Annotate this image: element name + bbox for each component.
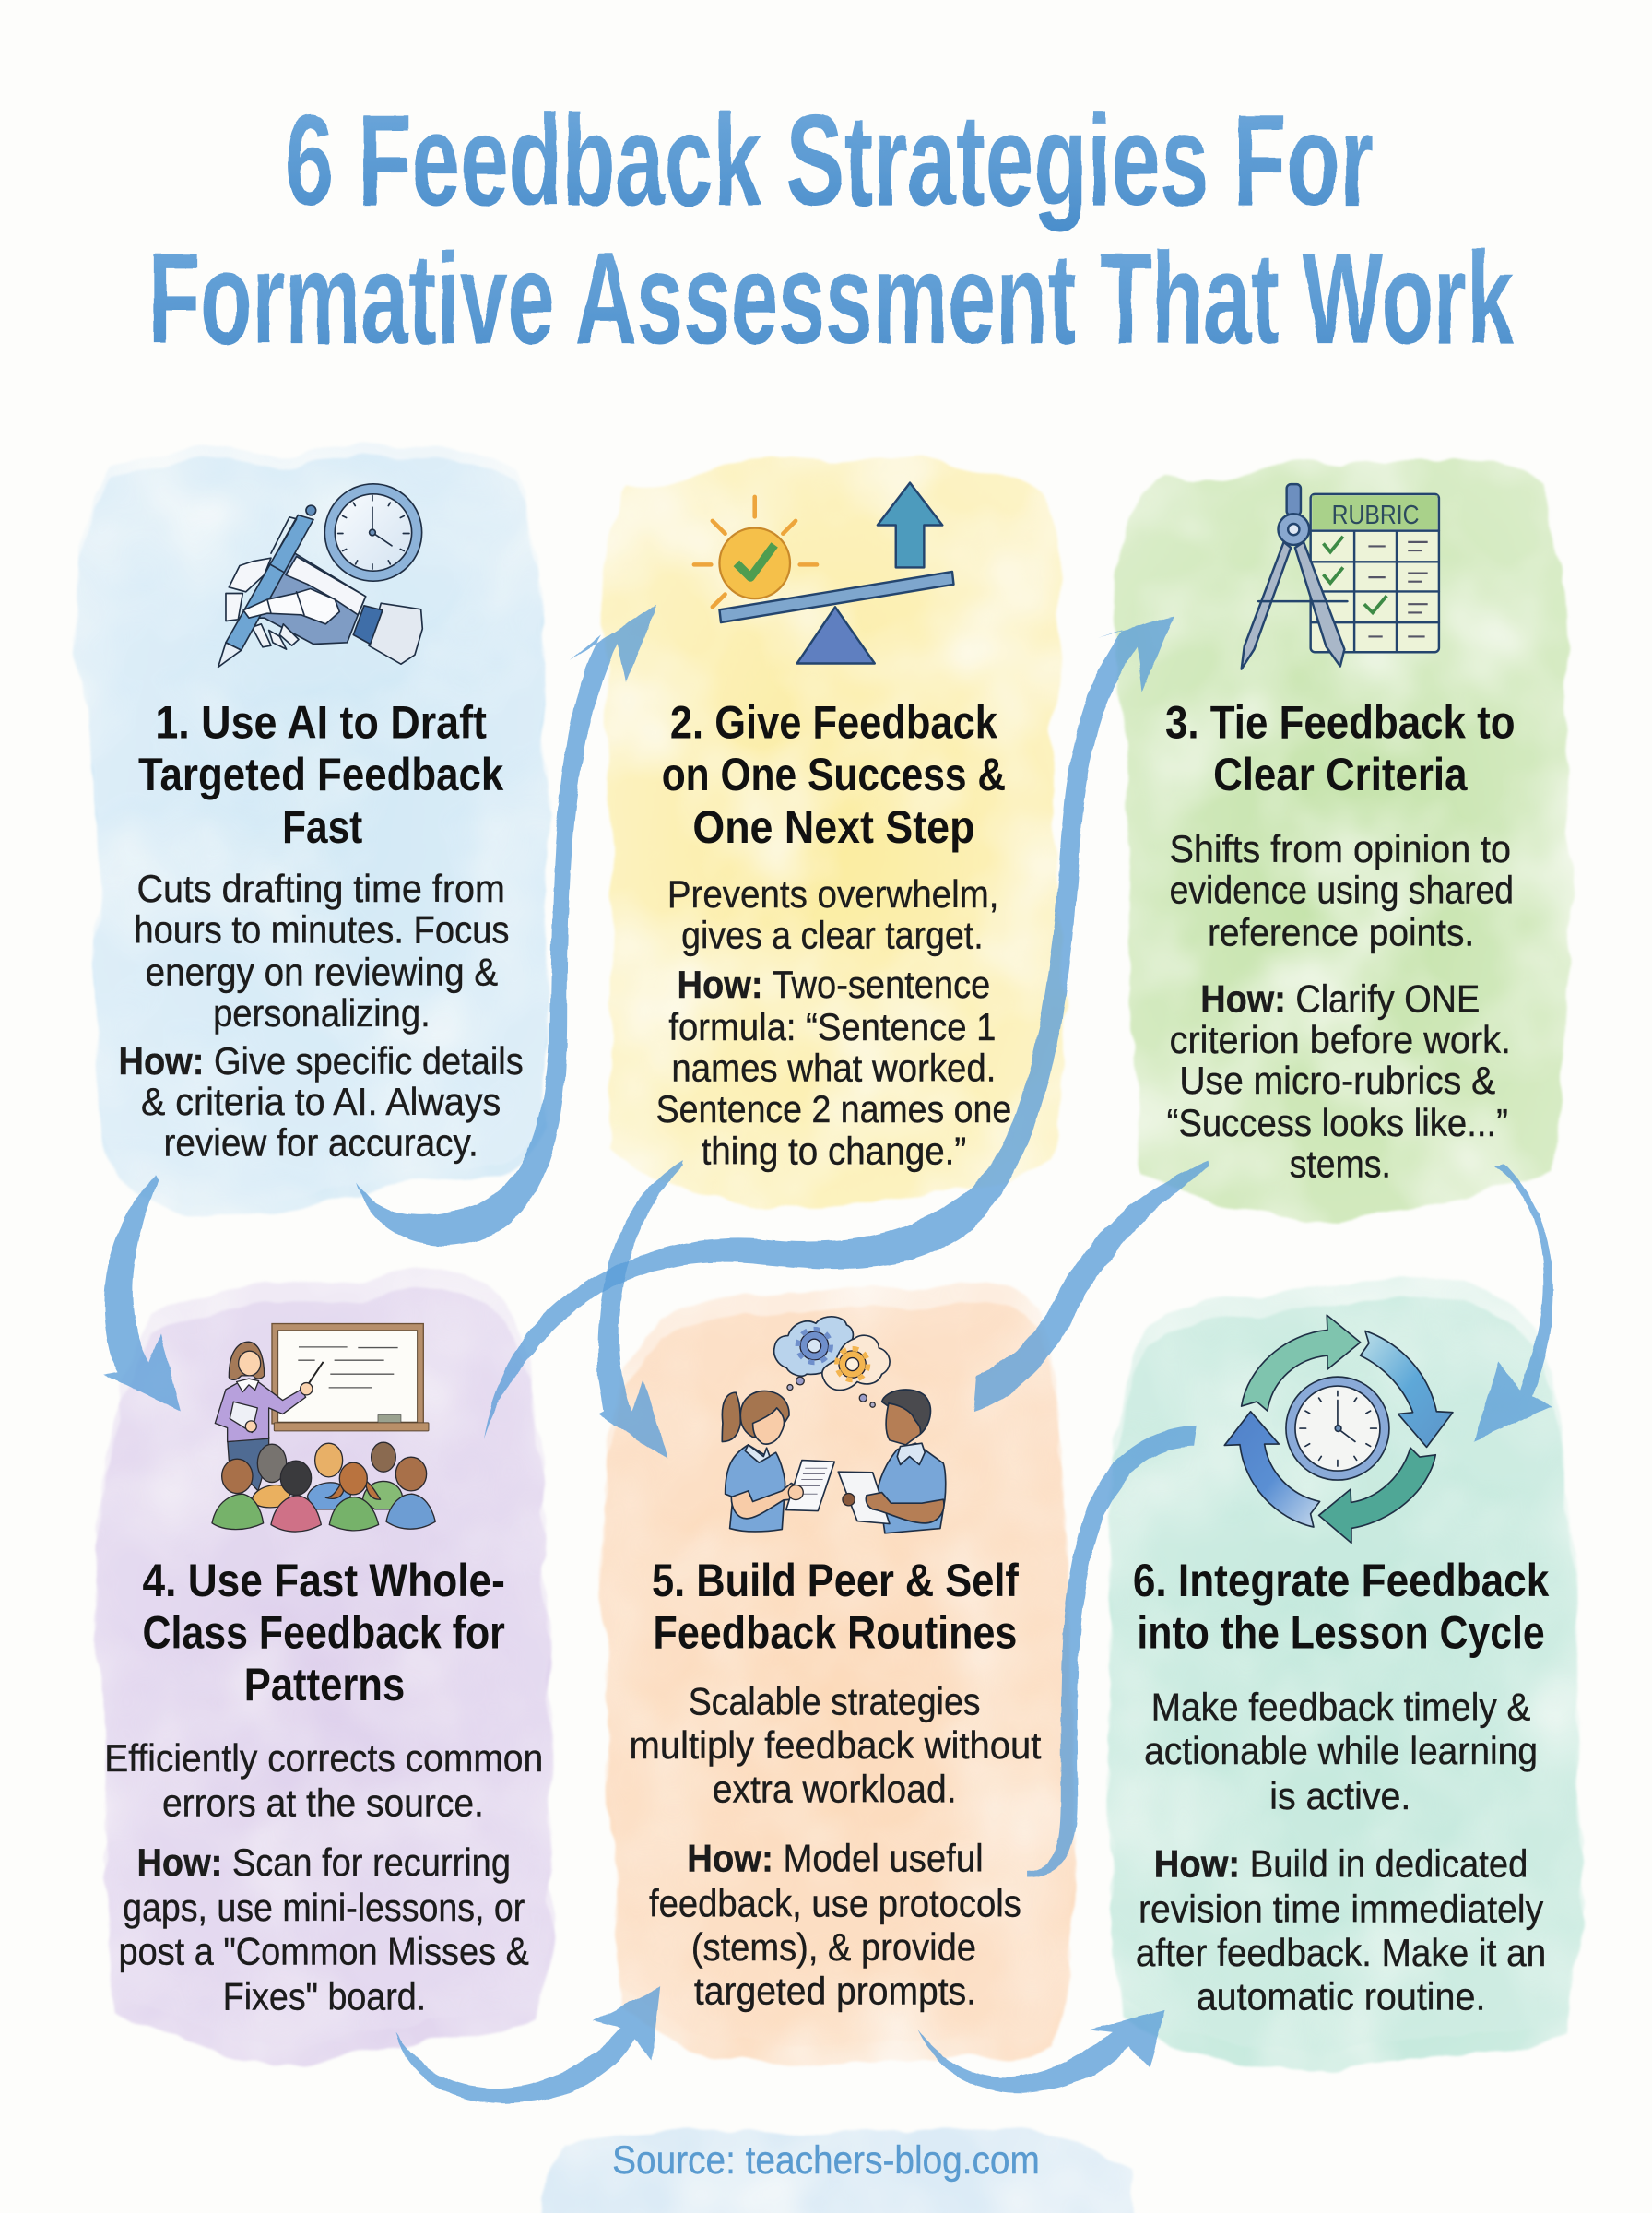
body: card 3: reference points.: [1208, 912, 1474, 954]
body: card 3: Use micro-rubrics &: [1179, 1059, 1495, 1102]
body: card 5: [630, 1681, 1042, 2012]
body: card 3: “Success looks like...”: [1167, 1102, 1508, 1144]
body: card 6: after feedback. Make it an: [1136, 1932, 1546, 1974]
body: card 4: post a "Common Misses &: [119, 1930, 529, 1972]
body: card 2: formula: “Sentence 1: [668, 1006, 996, 1048]
icon: two students exchanging papers with thought gears: [722, 1317, 946, 1533]
heading: card 4: 4. Use Fast Whole-: [143, 1554, 505, 1606]
body: card 4: [104, 1737, 543, 2018]
icon: lesson cycle clock with circular arrows: [1224, 1315, 1453, 1543]
icon: balance with sun check and up arrow: [694, 483, 953, 663]
body: card 4: Efficiently corrects common: [104, 1737, 543, 1780]
body: card 1: [119, 868, 524, 1165]
body: card 5: How: Model useful: [687, 1837, 984, 1879]
heading: card 1: 1. Use AI to Draft: [155, 696, 487, 749]
arrow: card 2 to card 5: [597, 1160, 683, 1460]
body: card 2: names what worked.: [671, 1047, 996, 1089]
source footer: Source: teachers-blog.com: [612, 2138, 1040, 2183]
panel: 3 text: [1165, 696, 1516, 1186]
body: card 4: gaps, use mini-lessons, or: [123, 1887, 525, 1929]
body: card 5: (stems), & provide: [691, 1926, 976, 1969]
body: card 5: Scalable strategies: [689, 1681, 981, 1723]
body: card 6: Make feedback timely &: [1151, 1686, 1530, 1729]
heading: card 2: One Next Step: [692, 800, 974, 853]
arrow: card 4 to card 3: [484, 615, 1174, 1439]
heading: card 2: [662, 696, 1006, 853]
body: card 2: Sentence 2 names one: [656, 1088, 1011, 1130]
body: card 3: criterion before work.: [1170, 1019, 1511, 1061]
body: card 1: & criteria to AI. Always: [141, 1081, 501, 1123]
heading: card 6: [1133, 1554, 1550, 1659]
arrow: card 5 to card 3: [974, 1160, 1210, 1412]
arrows: [104, 604, 1553, 2103]
body: card 3: [1167, 828, 1514, 1186]
heading: card 6: 6. Integrate Feedback: [1133, 1554, 1550, 1606]
title: [148, 88, 1514, 371]
icon: teacher at board with students: [212, 1324, 435, 1532]
body: card 1: review for accuracy.: [164, 1122, 478, 1165]
body: card 2: Prevents overwhelm,: [667, 873, 998, 916]
body: card 2: How: Two-sentence: [678, 964, 990, 1006]
body: card 3: stems.: [1290, 1143, 1391, 1186]
body: card 4: How: Scan for recurring: [136, 1841, 511, 1884]
body: card 5: feedback, use protocols: [649, 1882, 1021, 1924]
icon: rubric and compass: RUBRIC: [1332, 501, 1419, 530]
body: card 3: How: Clarify ONE: [1200, 977, 1480, 1020]
panel: 5 text: [630, 1554, 1042, 2012]
heading: card 3: 3. Tie Feedback to: [1165, 696, 1516, 749]
body: card 1: How: Give specific details: [119, 1040, 524, 1083]
body: card 3: Shifts from opinion to: [1170, 828, 1511, 870]
icon: rubric and compass: [1242, 484, 1439, 669]
arrow: card 5 to card 6 lower: [917, 2009, 1165, 2093]
heading: card 1: Fast: [282, 800, 362, 853]
panel backgrounds: [75, 443, 1580, 2072]
heading: card 5: Feedback Routines: [654, 1606, 1017, 1659]
body: card 5: multiply feedback without: [630, 1724, 1042, 1767]
panel: 1 text: [119, 696, 524, 1165]
body: card 2: gives a clear target.: [681, 915, 984, 957]
body: card 1: energy on reviewing &: [146, 951, 498, 993]
heading: card 2: on One Success &: [662, 748, 1006, 800]
heading: card 5: 5. Build Peer & Self: [652, 1554, 1019, 1606]
arrow: card 1 to card 4: [104, 1174, 181, 1412]
heading: card 6: into the Lesson Cycle: [1137, 1606, 1545, 1659]
body: card 3: evidence using shared: [1170, 870, 1514, 912]
icon: AI robot hand writing with clock: [218, 484, 422, 667]
body: card 1: hours to minutes. Focus: [134, 908, 509, 951]
body: card 4: Fixes" board.: [223, 1975, 426, 2018]
body: card 5: targeted prompts.: [694, 1970, 976, 2012]
body: card 6: actionable while learning: [1144, 1730, 1538, 1772]
body: card 6: [1136, 1686, 1546, 2018]
heading: card 4: Class Feedback for: [143, 1606, 505, 1659]
body: card 4: errors at the source.: [162, 1782, 484, 1825]
heading: card 2: 2. Give Feedback: [670, 696, 998, 749]
source footer: [543, 2127, 1136, 2213]
panel: 6 text: [1133, 1554, 1550, 2018]
body: card 2: [656, 873, 1011, 1173]
arrow: card 3 to card 6: [1474, 1163, 1553, 1441]
arrow: card 5 to card 6 upper: [1027, 1426, 1197, 1877]
heading: card 1: [138, 696, 504, 853]
body: card 1: Cuts drafting time from: [136, 868, 505, 910]
heading: card 4: Patterns: [244, 1658, 405, 1710]
heading: card 3: Clear Criteria: [1213, 748, 1468, 800]
body: card 6: revision time immediately: [1139, 1888, 1543, 1931]
arrow: card 1 to card 2: [356, 604, 657, 1246]
heading: card 5: [652, 1554, 1019, 1659]
arrow: card 4 to card 5: [395, 1987, 660, 2103]
body: card 6: is active.: [1269, 1775, 1410, 1817]
body: card 2: thing to change.”: [702, 1130, 966, 1173]
body: card 6: automatic routine.: [1197, 1975, 1485, 2018]
body: card 6: How: Build in dedicated: [1154, 1843, 1528, 1886]
heading: card 4: [143, 1554, 505, 1710]
panel: 4 text: [104, 1554, 543, 2018]
panel: 2 text: [656, 696, 1011, 1173]
body: card 1: personalizing.: [213, 992, 431, 1035]
heading: card 1: Targeted Feedback: [138, 748, 504, 800]
body: card 5: extra workload.: [713, 1768, 957, 1810]
heading: card 3: [1165, 696, 1516, 800]
